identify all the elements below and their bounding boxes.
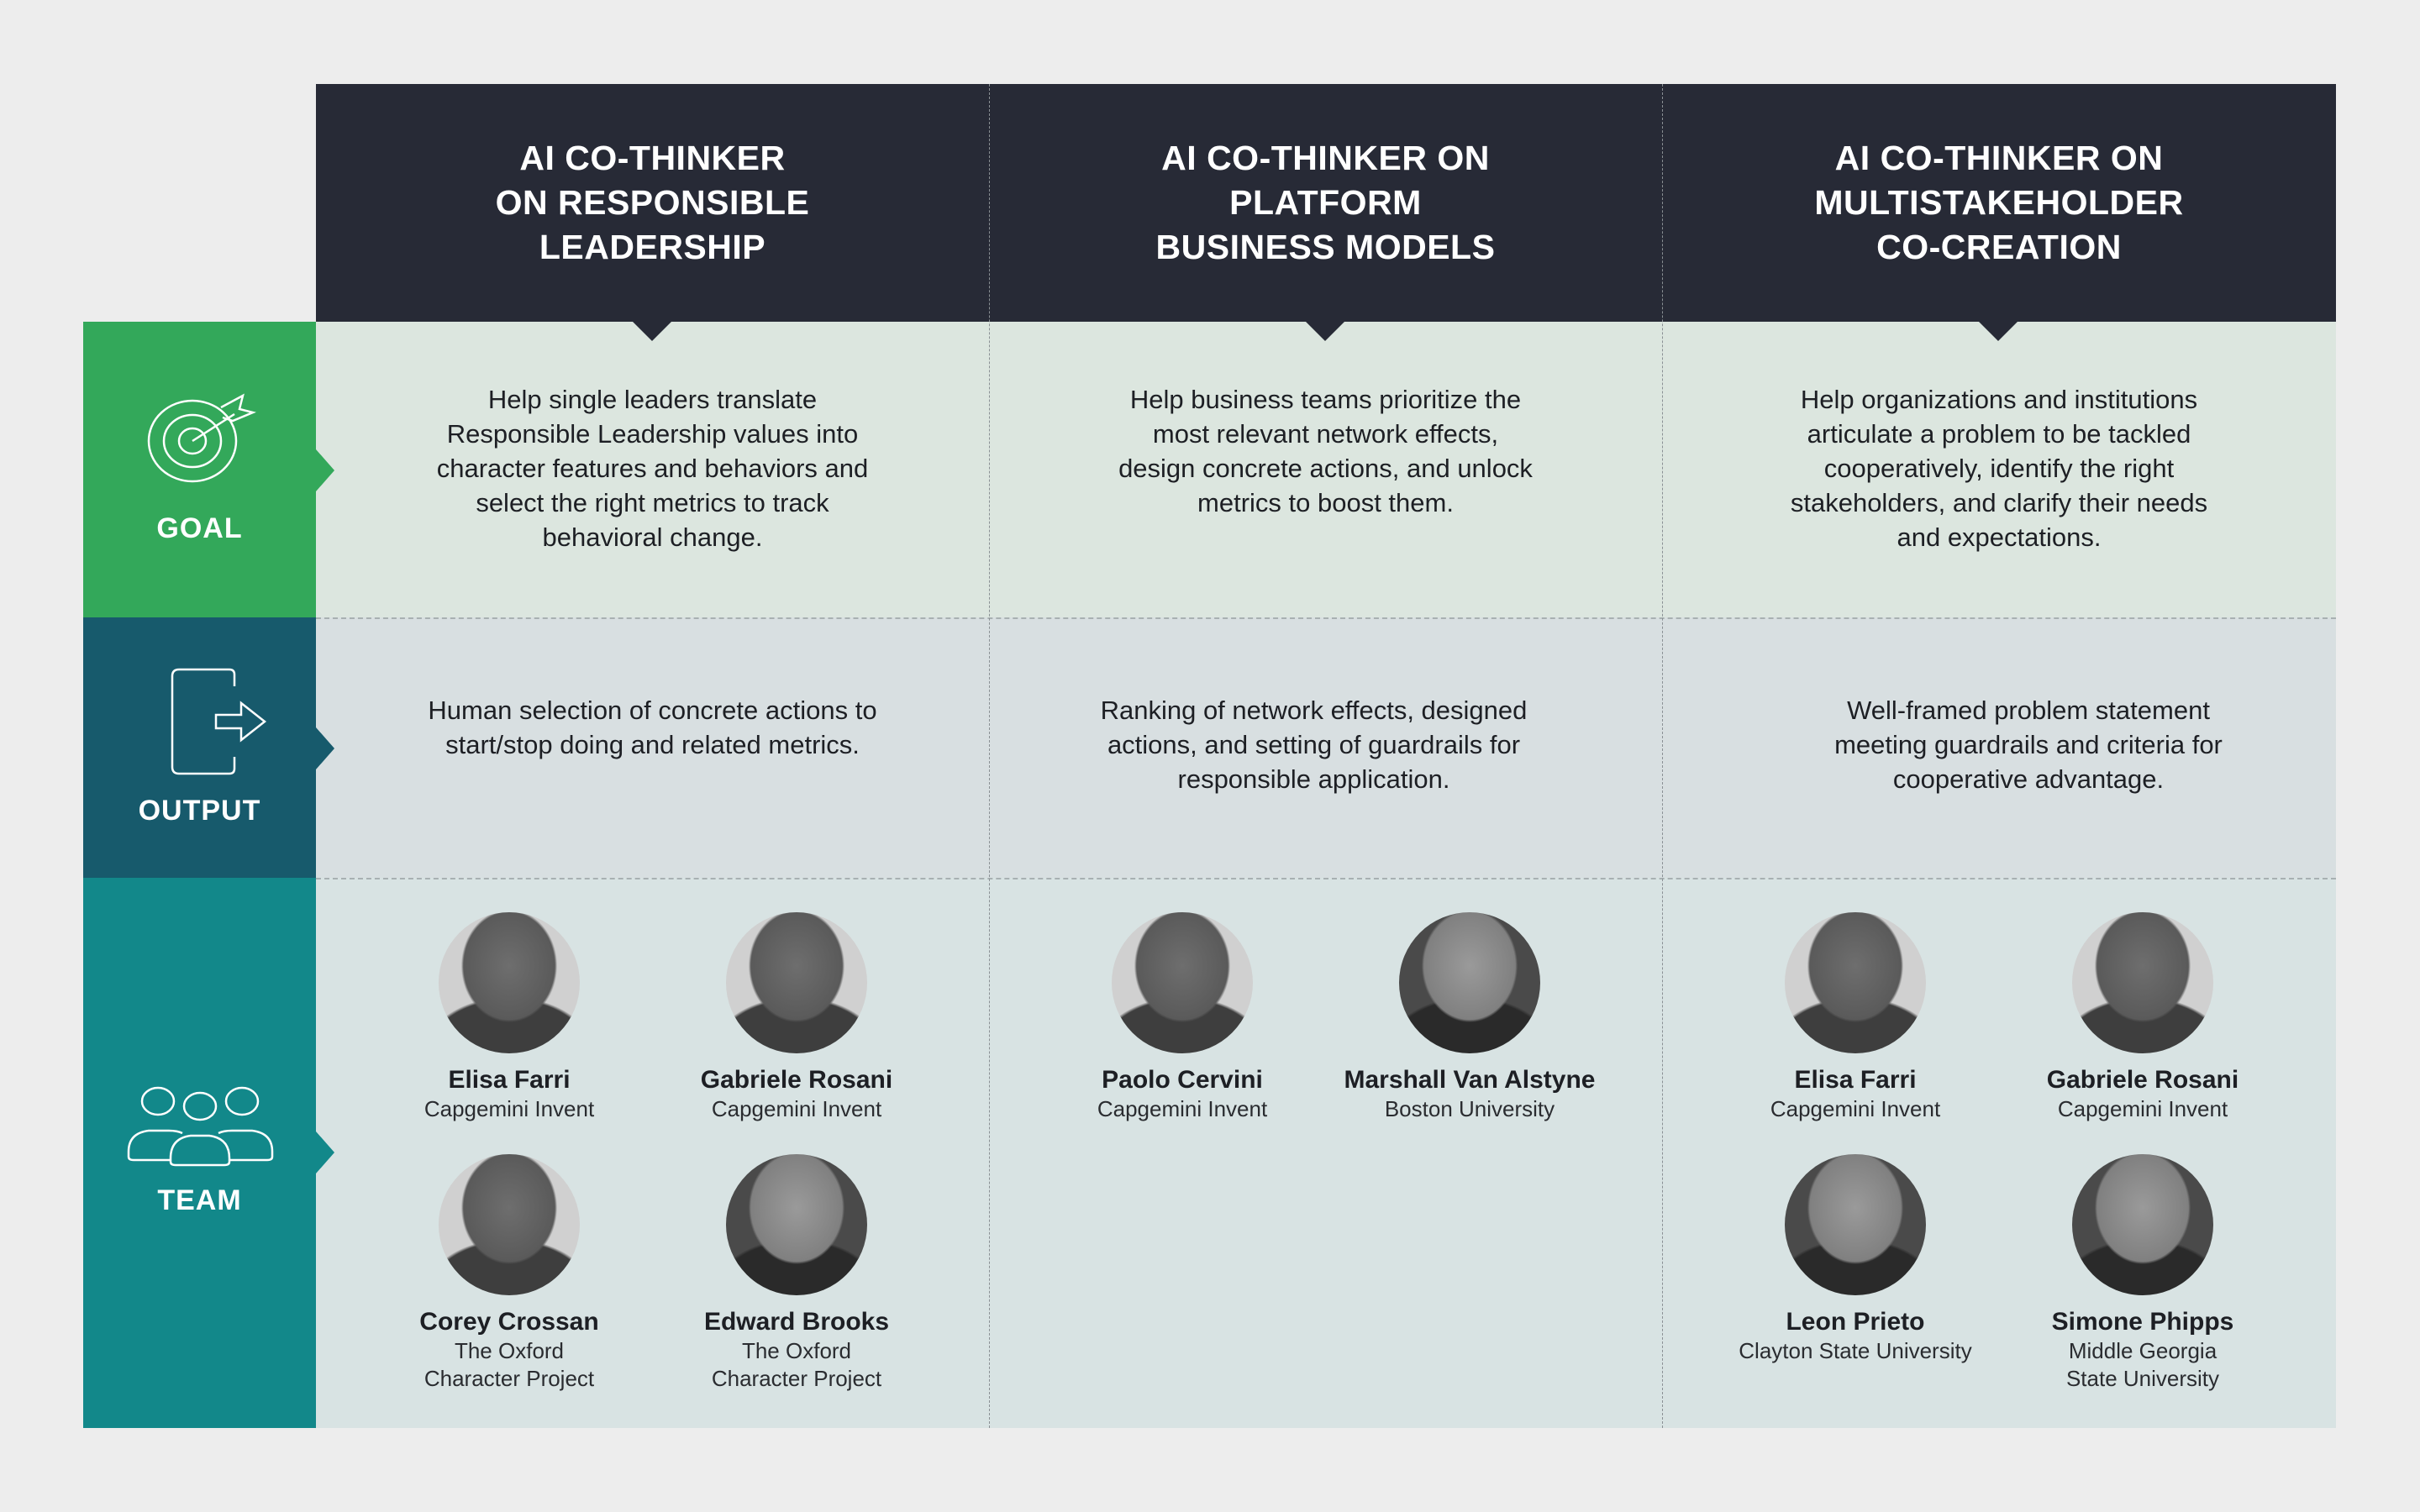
text: output 3: Well-framed problem statement: [1847, 696, 2210, 725]
heading: multistakeholder co-creation: [1814, 139, 2184, 266]
text: output 3: meeting guardrails and criteria for: [1834, 730, 2223, 759]
heading: platform business models: PLATFORM: [1229, 183, 1422, 222]
text: goal 1: behavioral change.: [543, 522, 762, 552]
person: Gabriele Rosani: Capgemini Invent: [712, 1096, 881, 1121]
person: Edward Brooks: Character Project: [712, 1366, 881, 1391]
text: goal 2: design concrete actions, and unlock: [1118, 454, 1533, 483]
heading: platform business models: AI CO-THINKER ON: [1161, 139, 1490, 177]
text: output 1: start/stop doing and related metrics.: [445, 730, 860, 759]
person: Edward Brooks: Edward Brooks: [704, 1308, 889, 1336]
text: goal 2: [1118, 385, 1533, 517]
person: Leon Prieto: [1739, 1154, 1972, 1363]
text: output 1: Human selection of concrete actions to: [428, 696, 877, 725]
person: Simone Phipps: State University: [2066, 1366, 2219, 1391]
text: goal 1: select the right metrics to track: [476, 488, 829, 517]
person: Corey Crossan: [419, 1154, 599, 1391]
icon: exit arrow: [171, 669, 266, 774]
person: Marshall Van Alstyne: Boston University: [1385, 1096, 1555, 1121]
person: Marshall Van Alstyne: Marshall Van Alstyne: [1344, 1066, 1595, 1094]
person: Simone Phipps: Middle Georgia: [2069, 1338, 2217, 1363]
heading: multistakeholder co-creation: AI CO-THINKER ON: [1835, 139, 2163, 177]
heading: multistakeholder co-creation: CO-CREATION: [1876, 228, 2122, 266]
text: goal 3: and expectations.: [1897, 522, 2101, 552]
person: Corey Crossan: Corey Crossan: [419, 1308, 599, 1336]
panel: goal label: [83, 322, 316, 617]
label: OUTPUT: OUTPUT: [139, 795, 260, 827]
text: goal 3: cooperatively, identify the right: [1824, 454, 2174, 483]
header notches: [633, 322, 2018, 341]
panel: output label: [83, 617, 316, 878]
icon: team: [128, 1087, 274, 1166]
heading: responsible leadership: LEADERSHIP: [539, 228, 765, 266]
panel: team label: [83, 878, 316, 1428]
header bar: [316, 84, 2336, 322]
person: Marshall Van Alstyne: [1344, 912, 1595, 1121]
text: goal 1: Help single leaders translate: [488, 385, 817, 414]
person: Elisa Farri 2: Capgemini Invent: [1770, 1096, 1940, 1121]
person: Gabriele Rosani: Gabriele Rosani: [701, 1066, 892, 1094]
label: TEAM: TEAM: [157, 1184, 242, 1216]
output row background: [316, 617, 2336, 878]
person: Paolo Cervini: Capgemini Invent: [1097, 1096, 1267, 1121]
person: Paolo Cervini: Paolo Cervini: [1102, 1066, 1263, 1094]
text: output 2: actions, and setting of guardrails for: [1107, 730, 1520, 759]
text: goal 3: [1791, 385, 2207, 552]
text: output 1: [428, 696, 877, 759]
text: goal 3: stakeholders, and clarify their needs: [1791, 488, 2207, 517]
heading: responsible leadership: ON RESPONSIBLE: [496, 183, 809, 222]
text: output 2: [1101, 696, 1527, 794]
text: goal 2: metrics to boost them.: [1197, 488, 1454, 517]
heading: responsible leadership: [496, 139, 809, 266]
heading: platform business models: [1156, 139, 1495, 266]
heading: platform business models: BUSINESS MODELS: [1156, 228, 1495, 266]
text: goal 2: most relevant network effects,: [1153, 419, 1498, 449]
person: Simone Phipps: [2052, 1154, 2233, 1391]
person: Elisa Farri 2: [1770, 912, 1941, 1121]
person: Elisa Farri 2: Elisa Farri: [1794, 1066, 1917, 1094]
text: output 2: Ranking of network effects, designed: [1101, 696, 1527, 725]
person: Corey Crossan: Character Project: [424, 1366, 594, 1391]
icon: target: [148, 393, 256, 482]
person: Edward Brooks: [704, 1154, 889, 1391]
person: Paolo Cervini: [1097, 912, 1267, 1121]
heading: multistakeholder co-creation: MULTISTAKEHOLDER: [1814, 183, 2184, 222]
person: Gabriele Rosani 2: [2047, 912, 2238, 1121]
person: Leon Prieto: Leon Prieto: [1786, 1308, 1924, 1336]
text: goal 1: Responsible Leadership values into: [447, 419, 858, 449]
person: Corey Crossan: The Oxford: [455, 1338, 564, 1363]
person: Edward Brooks: The Oxford: [742, 1338, 851, 1363]
text: output 3: [1834, 696, 2223, 794]
person: Elisa Farri: Elisa Farri: [448, 1066, 571, 1094]
person: Simone Phipps: Simone Phipps: [2052, 1308, 2233, 1336]
person: Gabriele Rosani: [701, 912, 892, 1121]
text: goal 1: character features and behaviors and: [437, 454, 868, 483]
person: Leon Prieto: Clayton State University: [1739, 1338, 1972, 1363]
label: GOAL: GOAL: [156, 512, 243, 544]
text: output 2: responsible application.: [1178, 764, 1450, 794]
person: Elisa Farri: Capgemini Invent: [424, 1096, 594, 1121]
text: goal 2: Help business teams prioritize the: [1130, 385, 1521, 414]
goal row background: [316, 322, 2336, 617]
text: goal 3: Help organizations and institutions: [1801, 385, 2197, 414]
person: Elisa Farri: [424, 912, 595, 1121]
heading: responsible leadership: AI CO-THINKER: [519, 139, 786, 177]
text: output 3: cooperative advantage.: [1893, 764, 2164, 794]
text: goal 1: [437, 385, 868, 552]
text: goal 3: articulate a problem to be tackled: [1807, 419, 2191, 449]
person: Gabriele Rosani 2: Capgemini Invent: [2058, 1096, 2228, 1121]
team row background: [316, 878, 2336, 1428]
person: Gabriele Rosani 2: Gabriele Rosani: [2047, 1066, 2238, 1094]
